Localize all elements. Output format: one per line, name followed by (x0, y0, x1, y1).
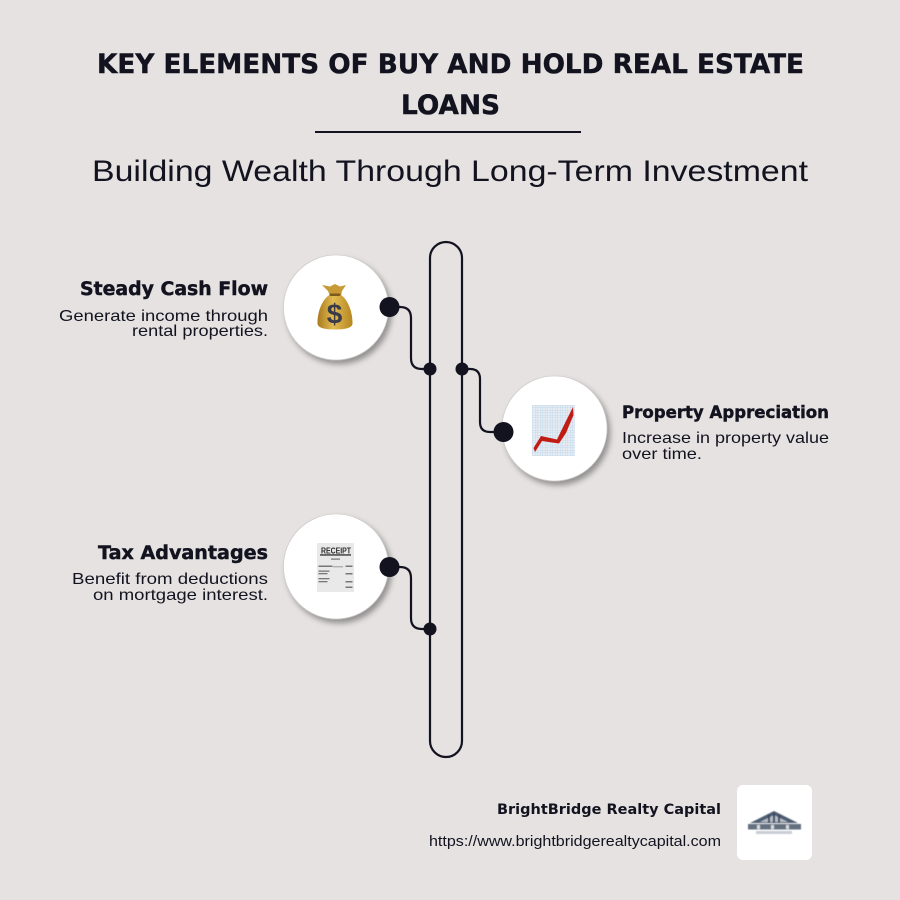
circle: property appreciation (502, 376, 607, 481)
description: steady cash flow (59, 308, 268, 340)
circle: steady cash flow (284, 255, 388, 360)
connector: tax advantages (389, 567, 430, 629)
node: track dot (456, 362, 468, 376)
title: LOANS (401, 90, 500, 121)
node: track dot (424, 362, 436, 376)
heading: property appreciation: Property Appreciation (622, 403, 829, 423)
description: steady cash flow: Generate income through (59, 308, 268, 325)
icon: receipt (317, 543, 354, 592)
title underline (315, 131, 581, 133)
icon: rising chart (532, 405, 575, 456)
icon: receipt: RECEIPT (321, 546, 351, 556)
panel: steady cash flow (59, 255, 436, 376)
description: property appreciation: over time. (622, 446, 702, 463)
description: steady cash flow: rental properties. (132, 323, 268, 340)
title: KEY ELEMENTS OF BUY AND HOLD REAL ESTATE (97, 49, 804, 80)
description: property appreciation: Increase in property value (622, 430, 829, 447)
logo card (737, 785, 812, 860)
title (97, 49, 804, 121)
node: track dot (424, 622, 436, 636)
dollar sign: $ (327, 298, 343, 330)
description: tax advantages: Benefit from deductions (72, 571, 268, 588)
panel: property appreciation (456, 362, 829, 481)
icon: money bag (317, 284, 353, 330)
panel: tax advantages (72, 514, 436, 636)
footer: website: https://www.brightbridgerealtycapital.com (429, 834, 721, 850)
timeline track (430, 242, 462, 757)
node: large dot (494, 422, 514, 442)
heading: tax advantages: Tax Advantages (98, 543, 268, 564)
subtitle: Building Wealth Through Long-Term Investment (92, 155, 809, 188)
heading: steady cash flow: Steady Cash Flow (80, 279, 268, 300)
node: large dot (380, 297, 400, 317)
footer: company name: BrightBridge Realty Capital (497, 802, 721, 818)
description: tax advantages (72, 571, 268, 604)
circle: tax advantages (284, 514, 388, 619)
description: tax advantages: on mortgage interest. (93, 587, 268, 604)
logo mark (748, 811, 801, 834)
connector: steady cash flow (389, 307, 430, 369)
node: large dot (380, 557, 400, 577)
description: property appreciation (622, 430, 829, 463)
connector: property appreciation (462, 369, 503, 432)
